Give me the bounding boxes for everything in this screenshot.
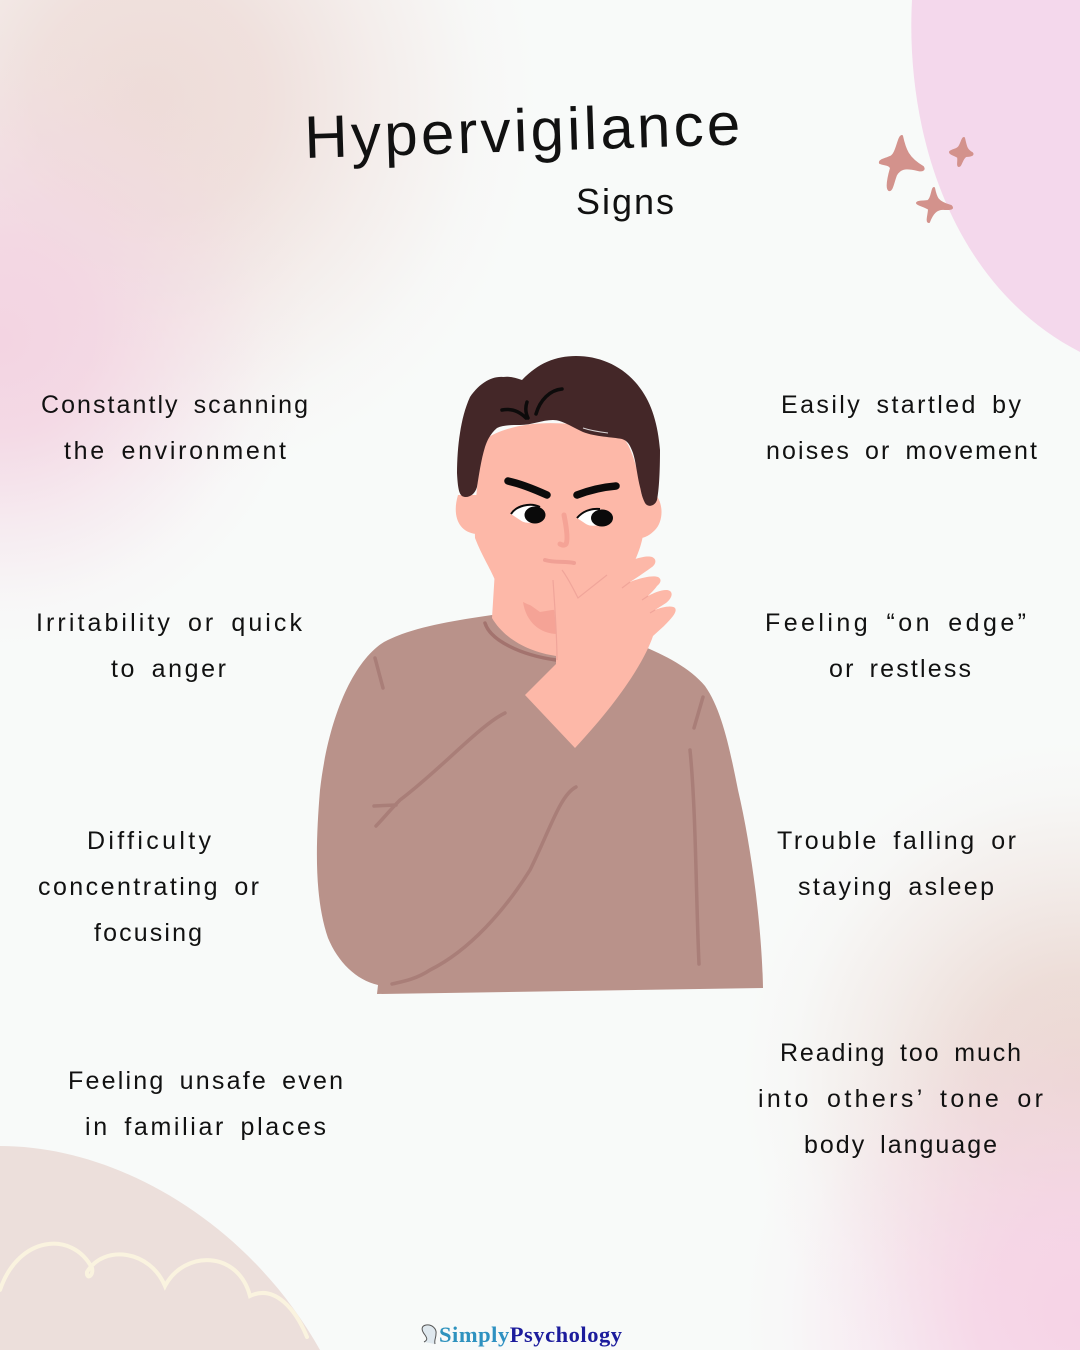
sign: reading too much: Reading too much — [780, 1039, 1021, 1067]
neck — [492, 570, 620, 656]
forearm and hand — [525, 556, 676, 748]
sleeve creases — [374, 658, 703, 984]
hair strands — [502, 389, 562, 418]
logo wordmark: SimplyPsychology — [439, 1322, 623, 1347]
cloud outline — [0, 1244, 307, 1337]
sign: feeling unsafe: in familiar places — [85, 1113, 326, 1141]
sign: reading too much: body language — [804, 1131, 997, 1159]
sparkle icons — [880, 136, 973, 222]
sign: reading too much — [758, 1039, 1043, 1159]
torso and sleeve — [317, 615, 763, 994]
sign: feeling unsafe — [68, 1067, 343, 1141]
sign: easily startled: noises or movement — [766, 437, 1037, 465]
sign: reading too much: into others’ tone or — [758, 1085, 1043, 1113]
eyebrows — [508, 481, 616, 495]
collar line — [485, 623, 556, 660]
sign: easily startled: Easily startled by — [781, 391, 1022, 419]
sign: difficulty concentrating: Difficulty — [87, 827, 212, 855]
decorative blob: bottom left — [0, 1146, 320, 1350]
logo icon — [422, 1325, 436, 1344]
sign: on edge — [765, 609, 1026, 683]
eyes — [511, 505, 613, 526]
illustration: thinking man — [317, 356, 763, 994]
sign: irritability: to anger — [111, 655, 226, 683]
mouth — [545, 560, 574, 563]
title: Hypervigilance — [303, 90, 741, 171]
sign: difficulty concentrating: concentrating or — [38, 873, 259, 901]
sign: trouble sleeping: staying asleep — [798, 873, 994, 901]
neck shadow — [523, 602, 558, 634]
sign: constantly scanning: the environment — [64, 437, 286, 465]
sign: feeling unsafe: Feeling unsafe even — [68, 1067, 343, 1095]
decorative blob: top right — [911, 0, 1080, 352]
sign: on edge: or restless — [829, 655, 971, 683]
sign: trouble sleeping — [777, 827, 1016, 901]
sign: on edge: Feeling “on edge” — [765, 609, 1026, 637]
sign: irritability: Irritability or quick — [36, 609, 302, 637]
sign: constantly scanning — [41, 391, 308, 465]
sign: difficulty concentrating: focusing — [94, 919, 202, 947]
hair highlight — [583, 428, 608, 433]
hair — [457, 356, 660, 506]
sign: irritability — [36, 609, 302, 683]
sign: trouble sleeping: Trouble falling or — [777, 827, 1016, 855]
sign: easily startled — [766, 391, 1037, 465]
finger lines — [553, 570, 655, 660]
logo: SimplyPsychology — [422, 1322, 623, 1347]
sign: constantly scanning: Constantly scanning — [41, 391, 308, 419]
subtitle: Signs — [576, 181, 674, 222]
nose — [560, 515, 567, 545]
face — [475, 423, 644, 612]
sign: difficulty concentrating — [38, 827, 259, 947]
ears — [456, 495, 662, 538]
